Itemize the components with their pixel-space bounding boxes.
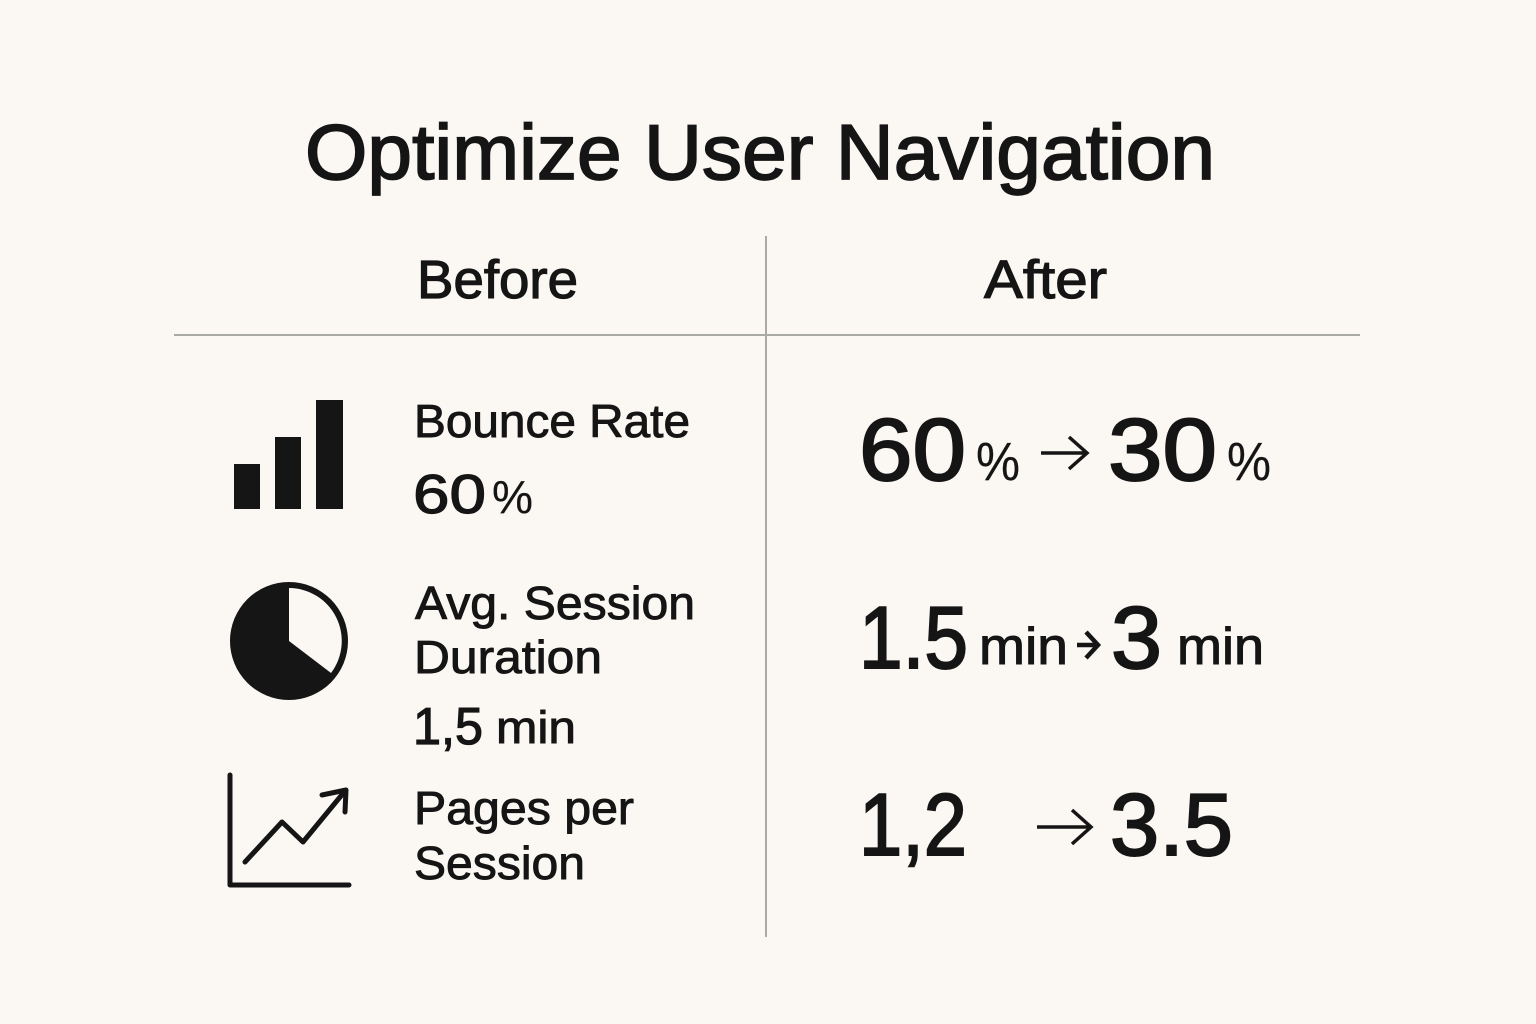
after: session duration change: 3 [1111,588,1162,687]
after: session duration change [859,588,1264,687]
after: pages per session change: 1,2 [859,775,967,874]
title: Optimize User Navigation [305,108,1215,196]
after: session duration change: min [979,618,1068,676]
before: bounce rate: 60 [413,463,486,525]
icon: bar chart [234,400,343,509]
before: pages per session [414,782,634,889]
before: average session duration: 1,5 [413,698,483,756]
heading: before: Before [417,250,578,310]
after: bounce rate change: % [976,432,1020,492]
before: average session duration: min [496,702,576,753]
icon: pie chart [230,582,348,700]
icon: line chart [230,775,349,885]
after: pages per session change: 3.5 [1110,775,1233,874]
before: average session duration [413,577,695,756]
before: bounce rate: % [492,471,533,523]
after: bounce rate change [859,400,1271,499]
before: bounce rate [413,395,690,525]
heading: after: After [984,250,1107,310]
before: average session duration: Avg. Session [415,577,695,629]
after: session duration change: 1.5 [859,588,968,687]
after: bounce rate change: 60 [859,400,966,499]
after: bounce rate change: 30 [1108,400,1217,499]
before: pages per session: Session [414,837,585,889]
before: average session duration: Duration [414,631,602,683]
after: pages per session change [859,775,1233,874]
before: pages per session: Pages per [414,782,634,834]
before: bounce rate: Bounce Rate [414,395,690,447]
after: bounce rate change: % [1227,432,1271,492]
after: session duration change: min [1177,618,1264,676]
